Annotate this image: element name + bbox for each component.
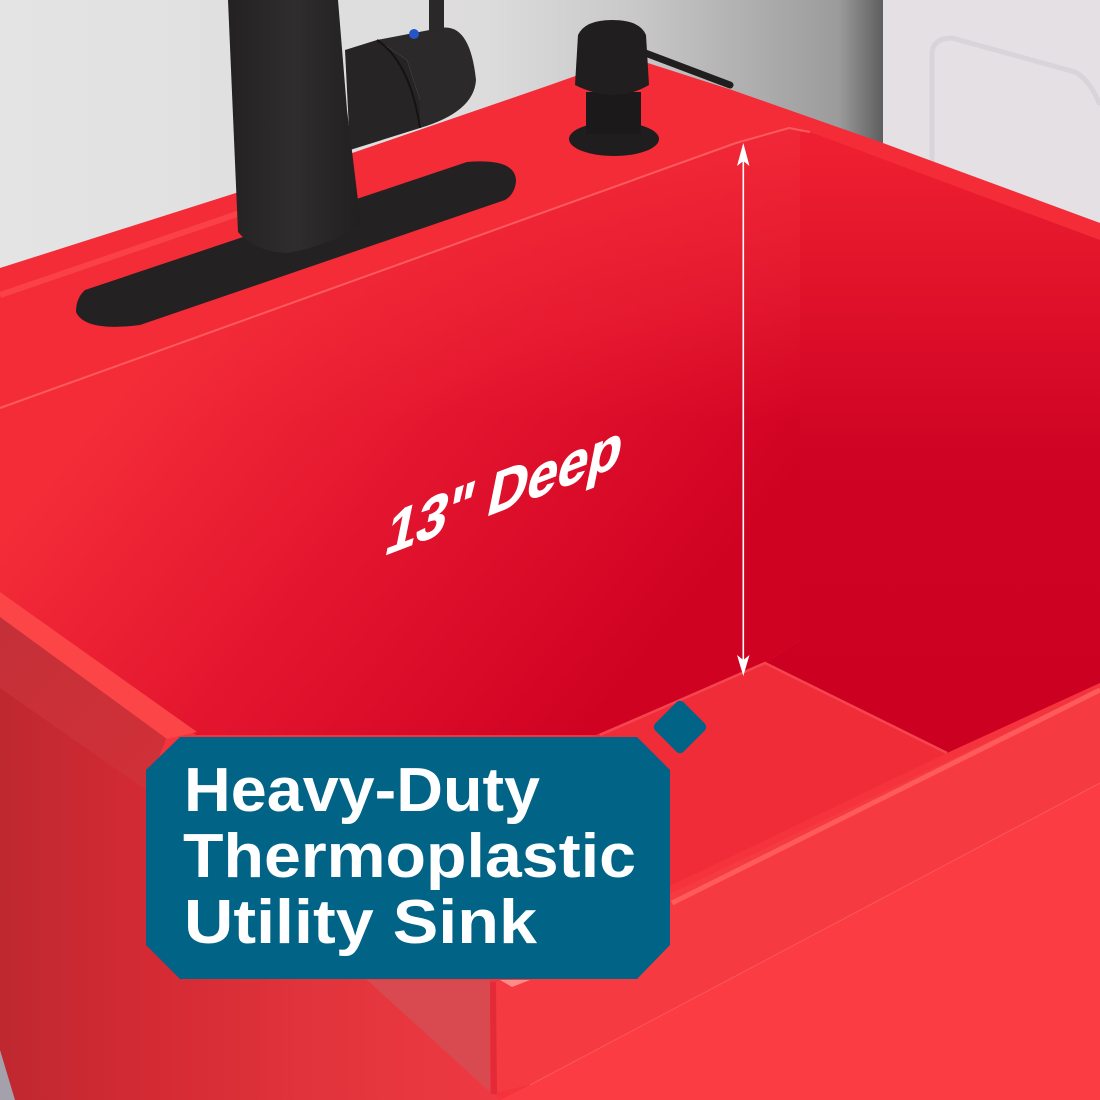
faucet handle	[345, 0, 476, 150]
floor corner highlight	[600, 663, 947, 753]
sink deck	[0, 57, 1100, 410]
callout title line 2: Thermoplastic	[183, 822, 636, 891]
floor edge sliver	[0, 1050, 15, 1100]
soap dispenser	[569, 20, 730, 156]
depth label: 13" Deep	[380, 409, 630, 570]
background wall	[0, 0, 1100, 300]
left rim highlight	[0, 592, 197, 739]
callout panel	[146, 737, 670, 979]
rim highlight	[0, 128, 810, 408]
sink corner	[367, 980, 490, 1092]
sink right wall	[765, 132, 1100, 753]
back wall top glow	[0, 128, 800, 430]
sink basin floor	[560, 663, 947, 900]
callout diamond	[652, 699, 708, 755]
callout title line 3: Utility Sink	[184, 888, 538, 957]
deck lip	[0, 213, 240, 295]
corner shadow	[490, 982, 497, 1094]
front rim thin line	[530, 783, 1100, 1085]
sink back wall	[0, 128, 800, 735]
faucet body	[228, 0, 361, 253]
faucet deck plate	[76, 161, 516, 327]
sink front rim right	[490, 688, 1100, 1092]
callout title line 1: Heavy-Duty	[184, 756, 541, 825]
sink front face right	[500, 783, 1100, 1100]
sink front face left	[0, 600, 500, 1100]
front rim highlight	[672, 690, 1100, 903]
sink front rim left	[0, 617, 167, 790]
corner highlight	[500, 980, 530, 987]
depth arrow	[737, 143, 750, 676]
